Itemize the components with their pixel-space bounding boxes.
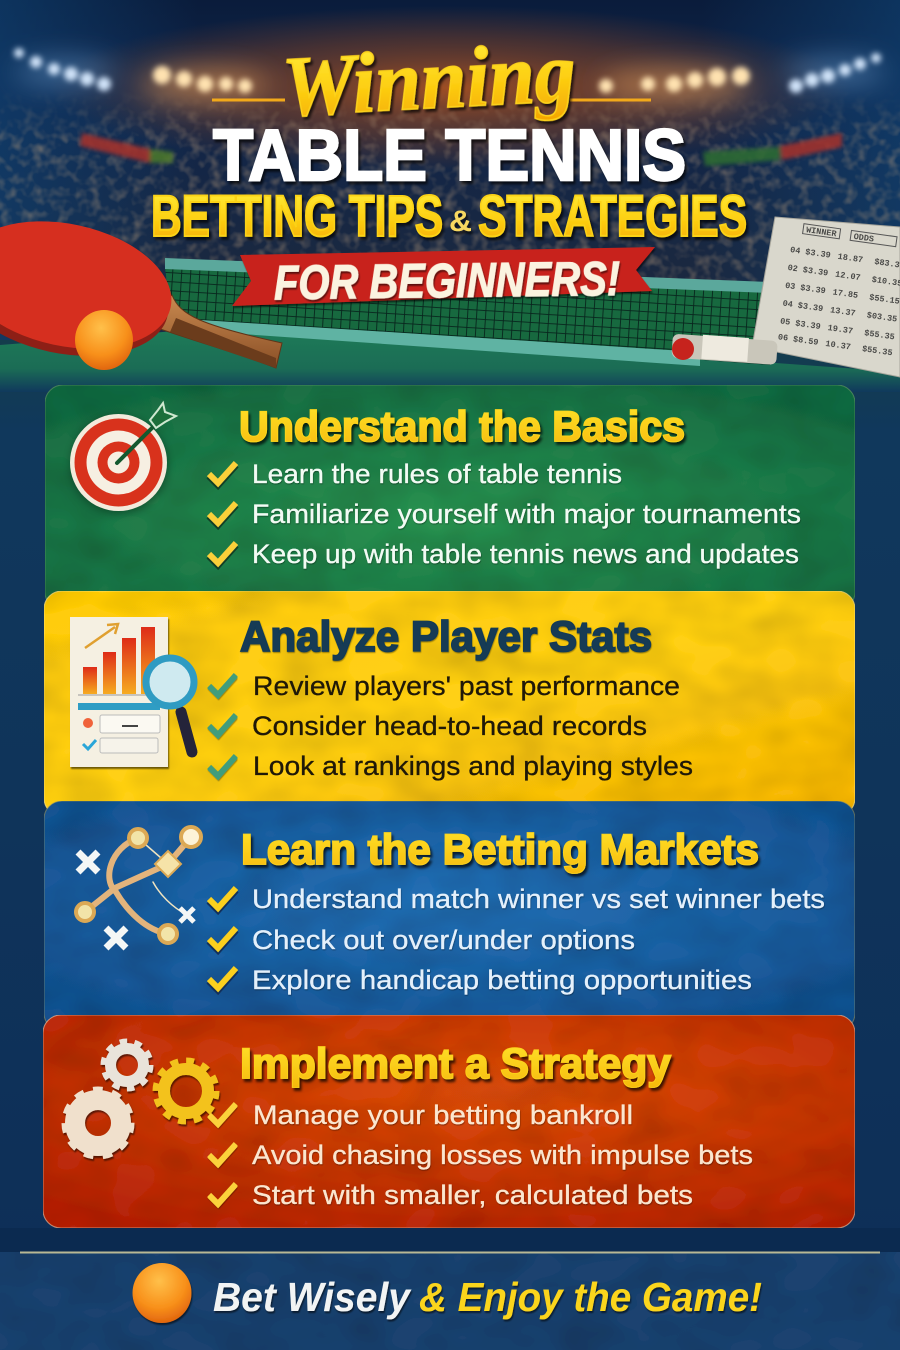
panel: learn the betting markets [44, 801, 855, 1031]
betting slip: 02 $3.39 [787, 263, 829, 279]
checklist: Avoid chasing losses with impulse bets [252, 1140, 753, 1170]
title: Betting Tips and Strategies: BETTING TIPS [151, 184, 443, 249]
icon: target with arrow [70, 403, 176, 514]
betting slip: $55.35 [864, 328, 895, 342]
betting slip: 17.85 [832, 287, 859, 301]
checklist: Understand match winner vs set winner bets [252, 884, 825, 914]
betting slip: 05 $3.39 [779, 316, 821, 332]
ping pong table [0, 325, 900, 392]
checklist: Review players' past performance [253, 671, 680, 701]
betting slip: 04 $3.39 [789, 245, 831, 261]
checklist [209, 884, 825, 995]
heading: Understand the Basics [239, 403, 685, 451]
betting slip: $03.35 [866, 310, 898, 325]
background [0, 0, 900, 520]
betting slip: 13.37 [829, 305, 856, 319]
arena banners [80, 133, 842, 166]
marker pen [671, 334, 778, 365]
betting slip: 04 $3.39 [782, 299, 824, 314]
checklist [209, 1100, 753, 1210]
betting slip: 18.87 [837, 252, 864, 265]
icon: chart with magnifier [70, 617, 194, 767]
net [165, 258, 770, 366]
betting slip: ODDS [853, 232, 875, 245]
closing message: Bet Wisely [213, 1274, 412, 1320]
checklist: Check out over/under options [252, 925, 635, 955]
betting slip: WINNER [805, 225, 838, 239]
title: Betting Tips and Strategies [151, 184, 747, 249]
closing message: & Enjoy the Game! [419, 1274, 762, 1320]
betting slip: 10.37 [825, 339, 851, 352]
betting slip: 03 $3.39 [784, 281, 826, 296]
betting slip: $55.35 [861, 344, 893, 358]
title: Betting Tips and Strategies: STRATEGIES [478, 184, 747, 249]
banner: for beginners: FOR BEGINNERS! [274, 253, 620, 310]
betting slip [752, 217, 900, 377]
betting slip: $55.15 [869, 293, 900, 307]
title: Table Tennis: TABLE TENNIS [213, 116, 686, 196]
checklist [209, 459, 801, 569]
heading: Analyze Player Stats [240, 613, 652, 661]
checklist [209, 671, 693, 781]
panel: implement a strategy [43, 1015, 855, 1228]
closing message [213, 1274, 762, 1320]
betting slip: 19.37 [827, 323, 854, 337]
betting slip: 12.07 [835, 270, 861, 283]
icon: strategy play diagram [76, 827, 201, 948]
panel: analyze player stats [44, 591, 855, 816]
panel: understand the basics [45, 385, 855, 610]
stadium lights [14, 48, 885, 101]
heading: Implement a Strategy [240, 1040, 671, 1088]
icon: footer ball [132, 1263, 192, 1323]
footer [0, 1228, 900, 1350]
betting slip: 06 $8.59 [777, 332, 819, 348]
checklist: Consider head-to-head records [252, 711, 647, 741]
checklist: Manage your betting bankroll [253, 1100, 633, 1130]
title: Winning: Winning [280, 23, 578, 135]
paddle [0, 203, 282, 374]
heading: Learn the Betting Markets [241, 826, 759, 874]
checklist: Learn the rules of table tennis [252, 459, 622, 489]
checklist: Familiarize yourself with major tournaments [252, 499, 801, 529]
icon: gears [65, 1042, 216, 1156]
checklist: Look at rankings and playing styles [253, 751, 693, 781]
checklist: Explore handicap betting opportunities [252, 965, 752, 995]
checklist: Start with smaller, calculated bets [252, 1180, 693, 1210]
checklist: Keep up with table tennis news and updates [252, 539, 799, 569]
title: Betting Tips and Strategies: & [449, 205, 472, 238]
orange ball [75, 310, 133, 370]
